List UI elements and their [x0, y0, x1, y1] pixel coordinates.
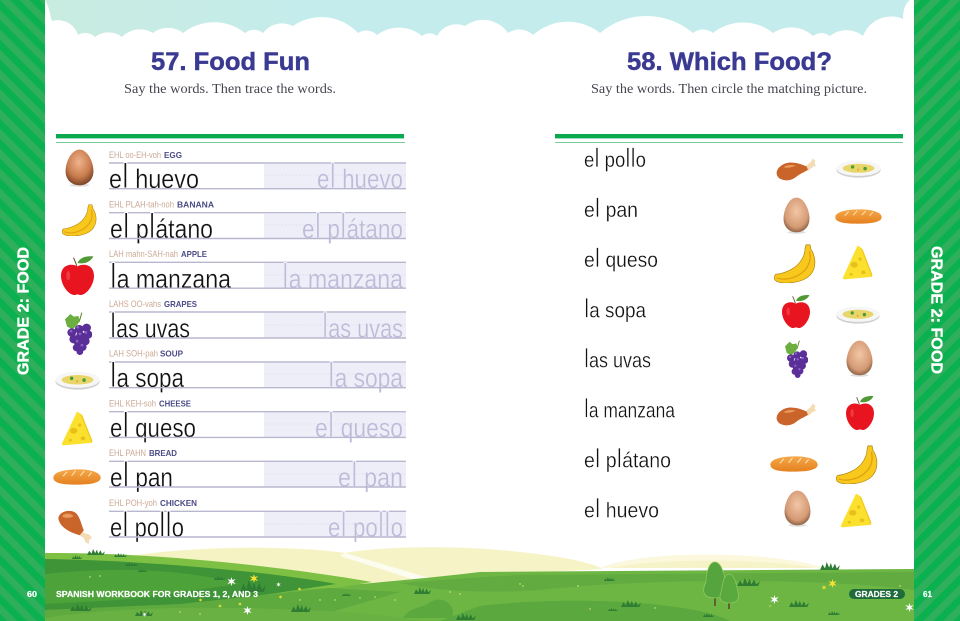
row: la sopa: la sopa: [328, 356, 404, 395]
flowers: [142, 574, 837, 617]
row: la manzana: la manzana: [282, 257, 404, 296]
row: el queso: [62, 398, 406, 445]
row: el plátano: BANANA: [177, 200, 214, 210]
flower on right border: [905, 603, 914, 612]
left green rule: [56, 134, 405, 143]
row: el plátano: el plátano: [110, 207, 213, 246]
row: el pollo: [58, 497, 406, 544]
row: el queso match: el queso: [584, 243, 658, 273]
row: el plátano: EHL PLAH-tah-noh: [109, 198, 174, 210]
row: el queso: CHEESE: [159, 398, 191, 408]
row: el pan: el pan: [338, 456, 403, 494]
row: el huevo match: el huevo: [584, 494, 659, 524]
row: el queso: EHL KEH-soh: [109, 398, 156, 408]
footer: right page number: 61: [923, 590, 933, 599]
row: la manzana: [61, 248, 406, 296]
row: el plátano: el plátano: [302, 207, 403, 246]
footer: left page number: 60: [27, 590, 38, 599]
row: el huevo: EGG: [164, 150, 182, 160]
row: las uvas match: [584, 341, 872, 378]
row: las uvas: las uvas: [110, 306, 190, 346]
row: el pan: BREAD: [149, 448, 177, 458]
row: la manzana match: [584, 394, 874, 430]
row: la manzana match: la manzana: [584, 394, 675, 424]
row: el pan: [53, 447, 406, 494]
row: las uvas: LAHS OO-vahs: [109, 298, 161, 309]
row: el queso match: [584, 243, 872, 283]
row: el pan match: el pan: [584, 193, 638, 223]
row: la sopa match: [584, 294, 880, 328]
row: el huevo: EHL oo-EH-voh: [109, 149, 161, 160]
row: el huevo: el huevo: [317, 157, 403, 196]
row: el pollo: CHICKEN: [160, 498, 197, 508]
row: la sopa: SOUP: [160, 348, 183, 358]
right green striped border: [914, 0, 960, 621]
hills and meadow: [45, 547, 914, 621]
trees: [704, 562, 739, 609]
row: el pollo match: el pollo: [584, 143, 646, 173]
row: la manzana: LAH mahn-SAH-nah: [109, 248, 178, 259]
panel: matching list: [584, 143, 882, 527]
row: el plátano: [62, 198, 406, 246]
grass tufts: [70, 549, 840, 620]
title: 57. Food Fun: 57. Food Fun: [151, 48, 310, 76]
title: 58. Which Food?: 58. Which Food?: [627, 48, 832, 76]
row: el pollo: el pollo: [110, 506, 184, 544]
row: la sopa: la sopa: [110, 356, 185, 395]
bush: [403, 600, 453, 618]
row: el pan match: [584, 193, 882, 234]
instructions right: Say the words. Then circle the matching picture.: [591, 81, 867, 96]
row: el pan: el pan: [110, 456, 173, 494]
row: la sopa match: la sopa: [584, 294, 646, 324]
right green rule: [555, 134, 903, 143]
row: las uvas match: las uvas: [584, 344, 651, 374]
left green striped border: [0, 0, 45, 621]
panel: tracing list: [53, 149, 406, 544]
row: el pan: EHL PAHN: [109, 447, 146, 458]
row: el plátano match: [584, 444, 877, 484]
row: la manzana: la manzana: [110, 257, 232, 296]
footer: book title: SPANISH WORKBOOK FOR GRADES 1, 2, AND 3: [56, 590, 259, 599]
row: el queso: el queso: [110, 406, 196, 445]
row: el pollo: el pollo: [328, 506, 403, 544]
row: el huevo: [66, 149, 406, 196]
row: la sopa: [55, 348, 406, 395]
row: la manzana: APPLE: [181, 249, 207, 259]
row: el plátano match: el plátano: [584, 444, 671, 474]
left side tab text: GRADE 2: FOOD: [16, 247, 32, 375]
instructions left: Say the words. Then trace the words.: [124, 81, 336, 96]
row: las uvas: las uvas: [322, 306, 403, 346]
meadow specks: [89, 575, 901, 615]
row: el pollo match: [584, 143, 881, 180]
row: el huevo: el huevo: [109, 157, 199, 196]
row: las uvas: [65, 298, 406, 355]
right side tab text: GRADE 2: FOOD: [928, 246, 944, 374]
sky and clouds: [45, 0, 914, 60]
footer: grade pill: [849, 589, 905, 599]
row: el huevo match: [584, 491, 871, 527]
row: la sopa: LAH SOH-pah: [109, 348, 158, 358]
row: el queso: el queso: [315, 406, 403, 445]
footer: grade pill: GRADES 2: [855, 590, 899, 599]
row: las uvas: GRAPES: [164, 299, 197, 309]
row: el pollo: EHL POH-yoh: [109, 497, 157, 508]
